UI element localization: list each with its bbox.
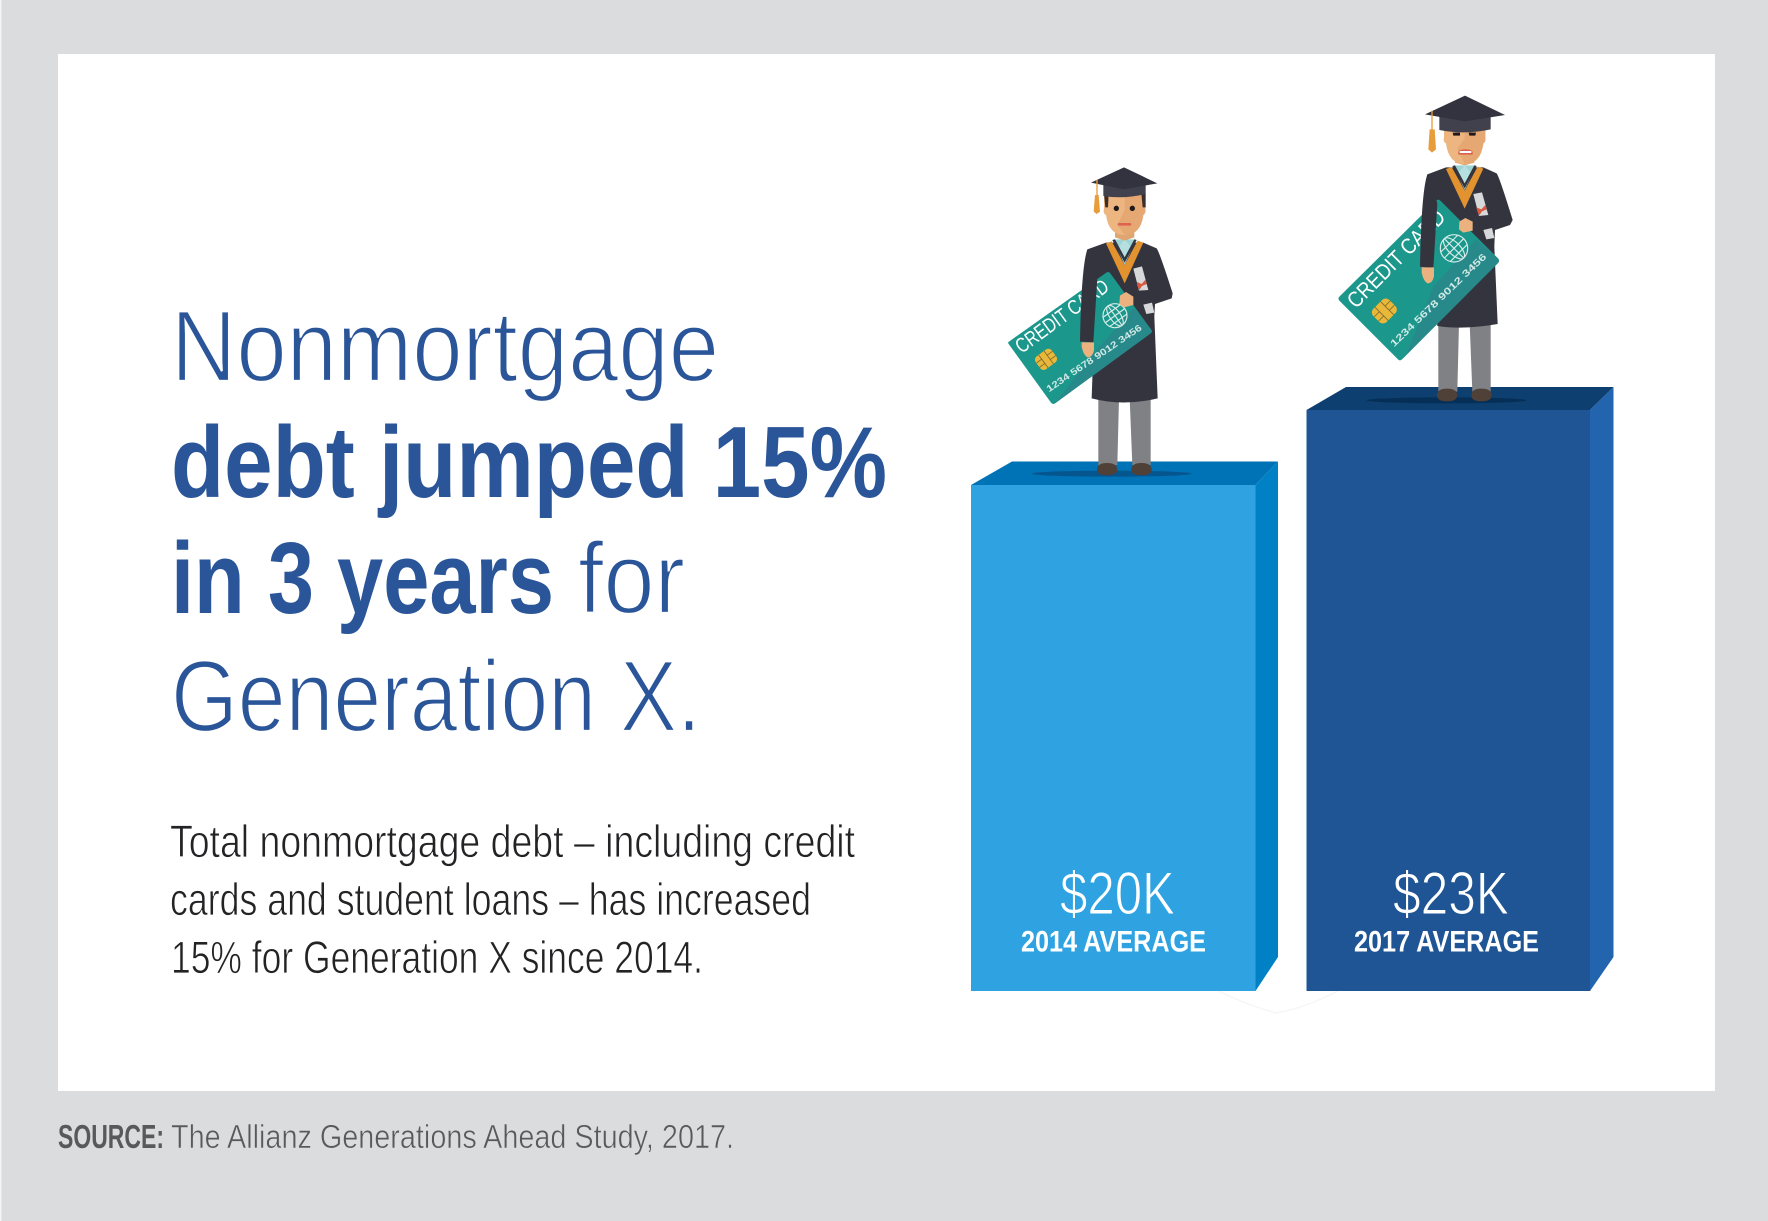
arms and hands xyxy=(1080,249,1097,342)
arms and hands xyxy=(1420,174,1437,268)
diploma xyxy=(1473,192,1494,239)
card number: 1234 5678 9012 3456 xyxy=(1045,323,1144,394)
title: debt jumped 15% xyxy=(171,407,887,519)
source line: SOURCE: xyxy=(58,1118,164,1155)
title: Generation X. xyxy=(171,641,701,753)
body text: Total nonmortgage debt – including credit xyxy=(170,816,855,867)
chip xyxy=(1370,296,1399,326)
card label: CREDIT CARD xyxy=(1342,204,1450,313)
pants xyxy=(1098,398,1151,465)
gown xyxy=(1082,243,1173,402)
sash xyxy=(1106,241,1143,283)
gown xyxy=(1422,167,1513,328)
source line: The Allianz Generations Ahead Study, 2017. xyxy=(171,1118,734,1155)
credit card xyxy=(1338,200,1499,360)
label: 2017 average: 2017 AVERAGE xyxy=(1354,926,1539,958)
diploma xyxy=(1133,266,1154,314)
value: $20K: $20K xyxy=(1060,860,1175,927)
body text xyxy=(170,816,855,983)
sash xyxy=(1446,167,1483,209)
globe xyxy=(1098,299,1132,332)
head xyxy=(1104,193,1146,235)
mortarboard cap xyxy=(1091,167,1157,214)
figure: graduate with credit card 2017 xyxy=(1338,96,1527,403)
body text: cards and student loans – has increased xyxy=(170,874,811,925)
figure: graduate with credit card 2014 xyxy=(1008,167,1192,477)
globe xyxy=(1435,229,1473,268)
collar and neck xyxy=(1453,165,1476,190)
collar and neck xyxy=(1113,239,1136,265)
chip xyxy=(1033,347,1059,372)
card label: CREDIT CARD xyxy=(1011,275,1113,358)
head xyxy=(1444,128,1485,164)
credit card xyxy=(1008,272,1152,404)
title: for xyxy=(578,523,685,635)
card number: 1234 5678 9012 3456 xyxy=(1388,251,1490,349)
bar: 2017 average xyxy=(1306,387,1614,991)
title: Nonmortgage xyxy=(171,291,719,403)
title: in 3 years xyxy=(171,523,554,635)
body text: 15% for Generation X since 2014. xyxy=(171,932,703,983)
value: $23K: $23K xyxy=(1393,860,1509,927)
white content panel xyxy=(58,54,1715,1091)
bar: 2014 average xyxy=(971,462,1278,991)
mortarboard cap xyxy=(1425,96,1505,153)
pants xyxy=(1438,323,1491,392)
title xyxy=(171,291,887,753)
label: 2014 average: 2014 AVERAGE xyxy=(1021,926,1206,958)
